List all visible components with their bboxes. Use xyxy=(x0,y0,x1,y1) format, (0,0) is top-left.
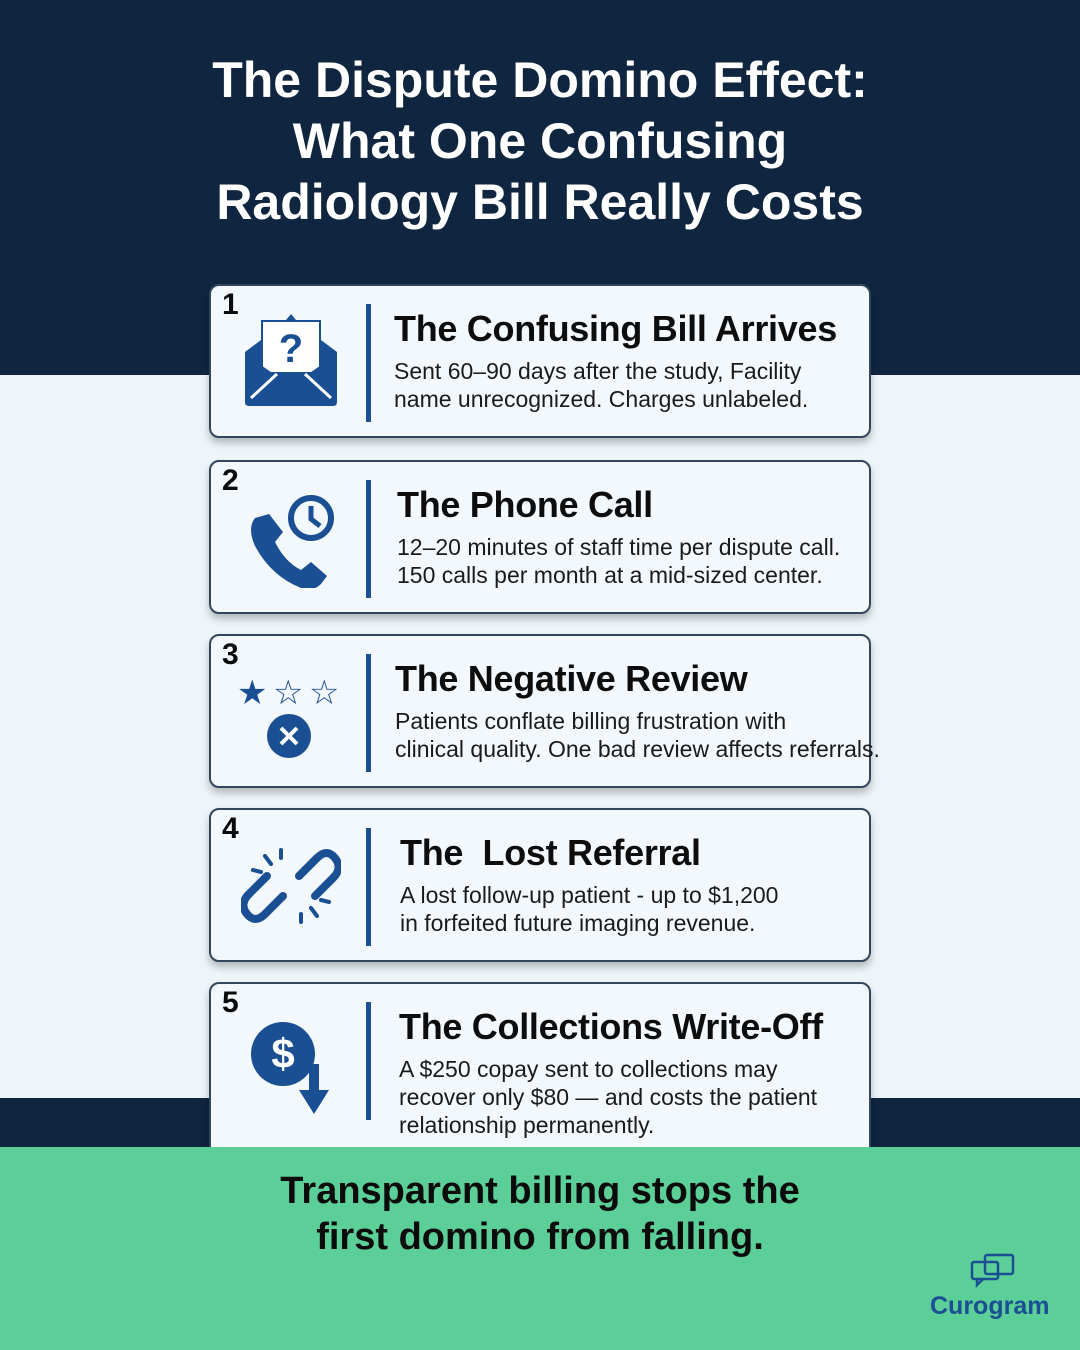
background: navy bottom band xyxy=(0,1098,1080,1148)
card 1: confusing bill: 1 xyxy=(222,288,239,321)
title: What One Confusing xyxy=(293,113,787,169)
card 5: collections write-off: The Collections Write-Off xyxy=(399,1006,823,1047)
card 5: collections write-off xyxy=(209,982,871,1157)
card 3: negative review: clinical quality. One bad review affects referrals. xyxy=(395,736,880,762)
footer: green band xyxy=(0,1147,1080,1350)
icon: dollar with down arrow xyxy=(251,1022,329,1114)
icon: stars and x xyxy=(237,674,339,758)
footer tagline: Transparent billing stops the xyxy=(280,1170,800,1212)
footer tagline: first domino from falling. xyxy=(316,1216,764,1258)
card 2: phone call: 150 calls per month at a mid-sized center. xyxy=(397,562,823,588)
icon: envelope with question xyxy=(245,314,337,406)
card 4: lost referral xyxy=(209,808,871,962)
title: The Dispute Domino Effect: xyxy=(212,52,868,108)
background: navy top xyxy=(0,0,1080,375)
icon: envelope with question: ? xyxy=(279,327,303,371)
card 4: lost referral: 4 xyxy=(222,812,239,845)
icon: stars and x: ☆ xyxy=(309,674,339,712)
card 2: phone call: 2 xyxy=(222,464,239,497)
card 2: phone call xyxy=(209,460,871,614)
logo: Curogram: Curogram xyxy=(930,1292,1049,1320)
card 1: confusing bill: Sent 60–90 days after the study, Facility xyxy=(394,358,801,384)
card 4: lost referral: in forfeited future imaging revenue. xyxy=(400,910,755,936)
card 2: phone call: 12–20 minutes of staff time per dispute call. xyxy=(397,534,840,560)
card 3: negative review: The Negative Review xyxy=(395,658,747,699)
icon: stars and x: ★ xyxy=(237,674,267,712)
card 1: confusing bill: The Confusing Bill Arrives xyxy=(394,308,837,349)
card 4: lost referral: A lost follow-up patient - up to $1,200 xyxy=(400,882,778,908)
card 5: collections write-off: 5 xyxy=(222,986,239,1019)
card 3: negative review: 3 xyxy=(222,638,239,671)
icon: stars and x: ☆ xyxy=(273,674,303,712)
card 1: confusing bill xyxy=(209,284,871,438)
card 5: collections write-off: relationship permanently. xyxy=(399,1112,654,1138)
card 1: confusing bill: name unrecognized. Charges unlabeled. xyxy=(394,386,808,412)
icon: broken chain xyxy=(241,848,341,924)
title: Radiology Bill Really Costs xyxy=(216,174,864,230)
icon: dollar with down arrow: $ xyxy=(271,1030,295,1077)
card 2: phone call: The Phone Call xyxy=(397,484,653,525)
icon: phone with clock xyxy=(251,495,334,588)
card 5: collections write-off: recover only $80 — and costs the patient xyxy=(399,1084,817,1110)
card 4: lost referral: The Lost Referral xyxy=(400,832,701,873)
card 3: negative review: Patients conflate billing frustration with xyxy=(395,708,786,734)
card 3: negative review xyxy=(209,634,871,788)
logo: Curogram xyxy=(930,1254,1049,1320)
footer tagline xyxy=(280,1170,800,1258)
title xyxy=(212,52,868,230)
card 5: collections write-off: A $250 copay sent to collections may xyxy=(399,1056,777,1082)
